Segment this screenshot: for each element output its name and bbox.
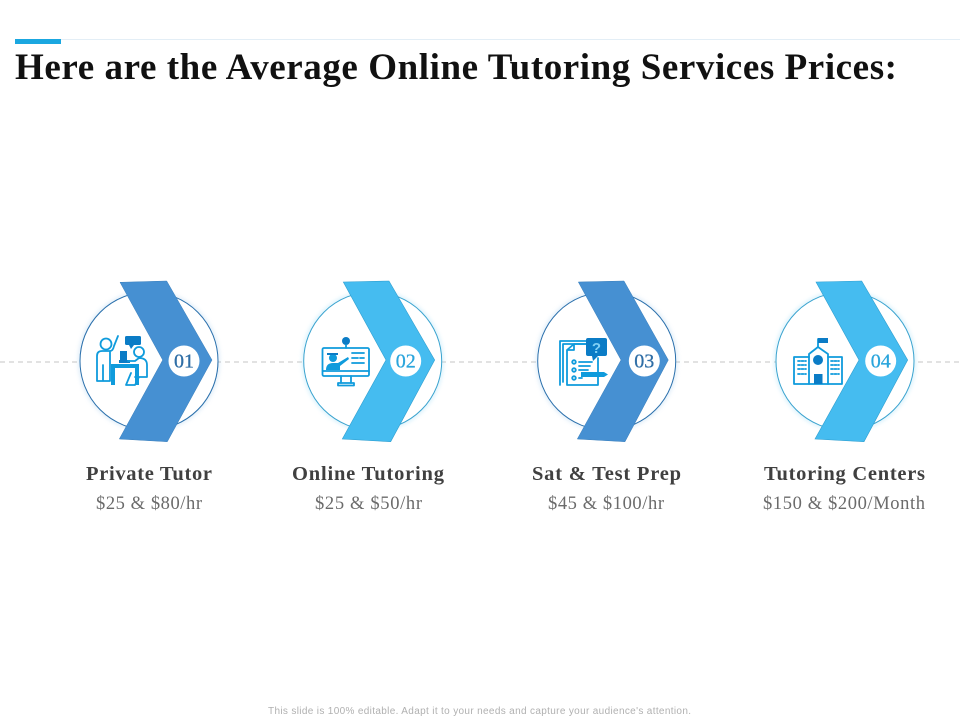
- label: private tutor: $25 & $80/hr: [96, 494, 202, 514]
- step 4 number badge: 04: [871, 350, 891, 372]
- step 3 number badge: 03: [634, 350, 654, 372]
- step 3 chevron: [577, 281, 668, 442]
- step 2 chevron: [342, 281, 435, 442]
- header rule: [15, 39, 960, 44]
- step 2 ring: [304, 292, 442, 430]
- panel: private tutor: [80, 281, 218, 442]
- step 1 ring: [80, 292, 218, 430]
- label: tutoring centers: $150 & $200/Month: [763, 494, 925, 514]
- label: online tutoring: [292, 463, 445, 514]
- step 4 ring: [776, 292, 914, 430]
- label: online tutoring: $25 & $50/hr: [315, 494, 422, 514]
- label: private tutor: Private Tutor: [86, 463, 212, 485]
- panel: sat and test prep: [538, 281, 676, 442]
- icon: question paper: ?: [592, 340, 601, 357]
- icon: online tutor on monitor: [322, 337, 369, 386]
- label: sat and test prep: Sat & Test Prep: [532, 463, 681, 485]
- step 4 number badge: [865, 346, 896, 376]
- step 2 number badge: [390, 346, 421, 376]
- panel: online tutoring: [304, 281, 442, 442]
- label: tutoring centers: [763, 463, 925, 514]
- step 3 number badge: [629, 346, 660, 376]
- label: sat and test prep: $45 & $100/hr: [548, 494, 664, 514]
- label: private tutor: [86, 463, 212, 514]
- step 2 number badge: 02: [396, 350, 416, 372]
- icon: tutor and student at desk: [97, 336, 147, 385]
- label: tutoring centers: Tutoring Centers: [764, 463, 925, 485]
- title: Here are the Average Online Tutoring Services Prices:: [15, 47, 897, 88]
- label: sat and test prep: [532, 463, 681, 514]
- dashed connector line: [0, 361, 960, 363]
- step 1 chevron: [80, 281, 218, 442]
- label: online tutoring: Online Tutoring: [292, 463, 445, 485]
- step 1 number badge: [168, 346, 200, 376]
- icon: school building: [794, 338, 842, 384]
- panel: tutoring centers: [776, 281, 914, 442]
- footer note: This slide is 100% editable. Adapt it to your needs and capture your audience's attention.: [268, 706, 691, 717]
- step 3 ring: [538, 292, 676, 430]
- step 4 chevron: [815, 281, 908, 442]
- step 1 number badge: 01: [174, 350, 194, 372]
- icon: question paper: [560, 338, 608, 385]
